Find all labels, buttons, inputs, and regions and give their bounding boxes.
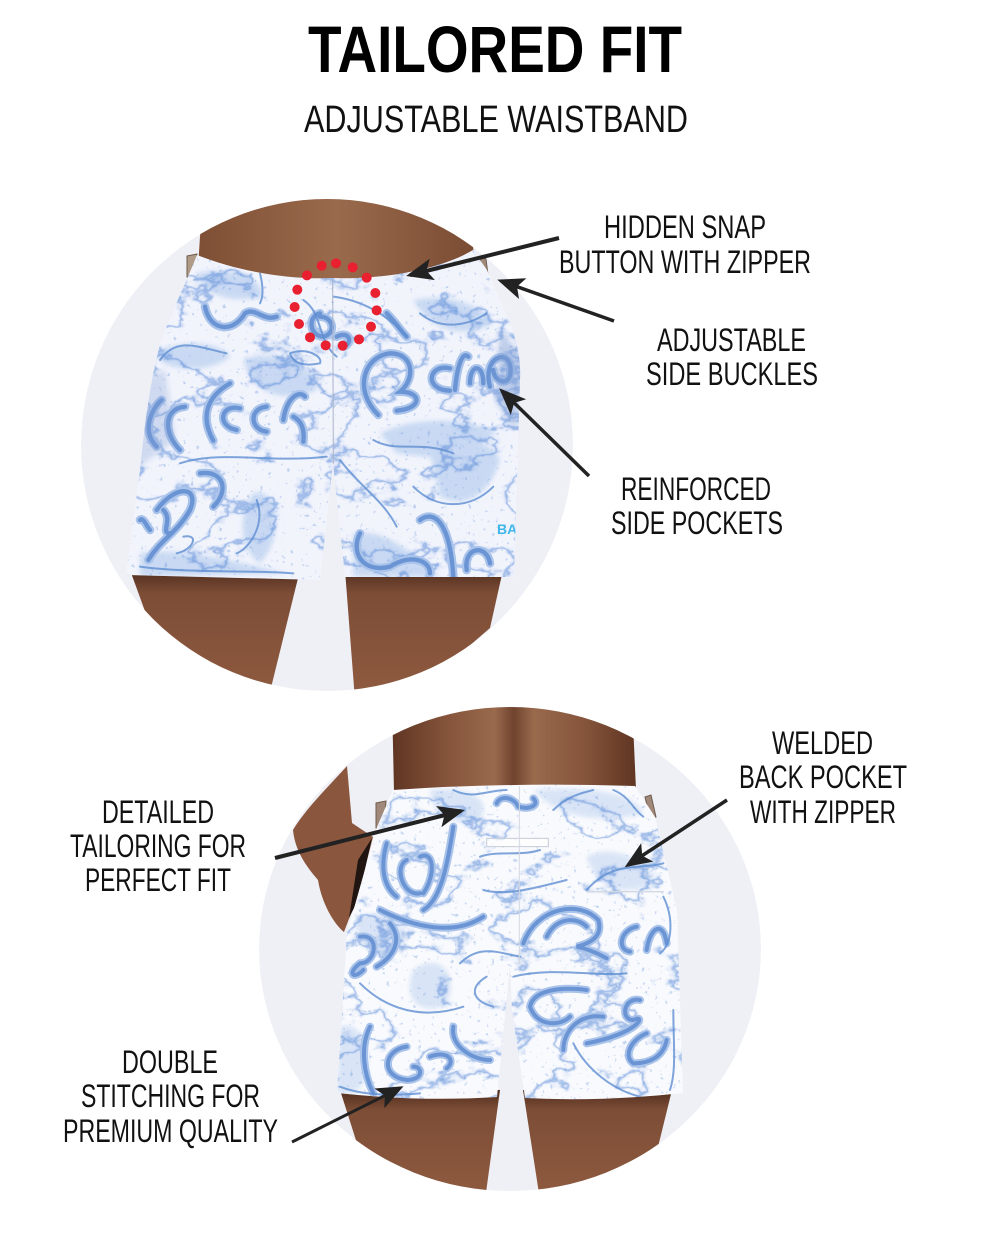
arrow: double stitching [292,1088,400,1142]
label: reinforced side pockets: REINFORCED [621,471,771,507]
waist tab [487,838,548,847]
arrow: hidden snap button [410,238,559,275]
label: detailed tailoring for perfect fit: DETAILED [102,794,214,830]
thin water streams [340,790,674,1097]
back pocket line [586,891,664,892]
shorts fabric [127,250,520,580]
label: hidden snap button with zipper: HIDDEN SNAP [604,209,766,245]
water wash patches [140,271,500,577]
arrow: detailed tailoring [275,811,461,858]
red dotted circle highlight [290,258,382,351]
left side buckle [376,801,386,828]
left leg [132,575,298,685]
shorts side shadow [492,332,520,427]
label: welded back pocket with zipper: WITH ZIPPER [750,794,896,830]
subtitle: ADJUSTABLE WAISTBAND [304,99,688,141]
label: double stitching for premium quality: STITCHING FOR [81,1078,260,1114]
lettering swirls [353,798,667,1093]
water veins texture [136,262,520,577]
label: welded back pocket with zipper: WELDED [772,725,873,761]
arrow: welded back pocket [628,800,727,865]
title: TAILORED FIT [308,12,682,86]
left leg [340,1090,500,1200]
shorts fabric [330,775,690,1110]
label: double stitching for premium quality: PREMIUM QUALITY [63,1113,278,1149]
label: adjustable side buckles: SIDE BUCKLES [646,356,818,392]
fly seam [332,280,334,464]
arm and hand [293,766,373,932]
arrow: reinforced side pockets [502,391,589,476]
label: double stitching for premium quality: DOUBLE [122,1044,218,1080]
thin water streams [140,273,493,573]
right side buckle [645,795,656,818]
water splatter texture [127,250,518,580]
right leg [523,1090,671,1190]
water veins texture [338,794,682,1098]
brand logo fragment: BA [497,521,517,537]
label: welded back pocket with zipper: BACK POCKET [739,759,907,795]
label: detailed tailoring for perfect fit [70,794,246,898]
left side buckle [187,254,197,278]
label: welded back pocket with zipper [739,725,907,830]
label: detailed tailoring for perfect fit: TAILORING FOR [70,828,246,864]
label: adjustable side buckles [646,322,818,392]
right side buckle [480,258,488,275]
panel: back view of shorts [259,700,761,1200]
label: detailed tailoring for perfect fit: PERFECT FIT [85,862,231,898]
back torso [392,700,636,792]
water splatter texture [338,784,682,1100]
label: hidden snap button with zipper [559,209,811,280]
panel: front view of shorts [81,190,573,700]
label: reinforced side pockets [611,471,783,541]
water wash patches [337,789,653,1093]
label: hidden snap button with zipper: BUTTON WITH ZIPPER [559,244,811,280]
left hip shadow [140,370,176,466]
hand shadow [349,838,372,918]
label: reinforced side pockets: SIDE POCKETS [611,505,783,541]
label: double stitching for premium quality [63,1044,278,1149]
label: adjustable side buckles: ADJUSTABLE [657,322,806,358]
right leg [346,577,502,690]
lettering swirls [140,307,511,577]
center back seam [518,786,520,964]
torso [198,199,474,278]
arrow: adjustable side buckles [501,281,614,321]
